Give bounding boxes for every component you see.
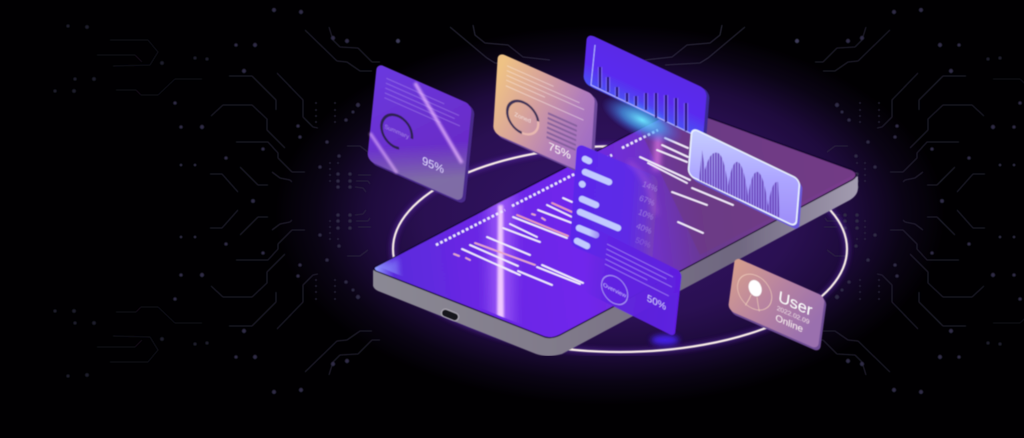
card: area chart [688, 128, 803, 231]
paragraph lines [605, 244, 673, 297]
stripe list [546, 113, 577, 150]
ring label: Summary [384, 124, 409, 141]
percentages: 50% [634, 236, 652, 250]
background glow [275, 25, 945, 405]
screen light beam [378, 110, 860, 345]
card: horizontal bars [570, 143, 659, 279]
screen text lines [454, 138, 733, 285]
glowing ring [393, 146, 847, 352]
ring [600, 270, 629, 310]
percentages: 10% [637, 208, 655, 222]
date: 2022.02.09 [776, 305, 810, 326]
card: 95% summary [367, 63, 475, 205]
status: Online [775, 313, 804, 336]
percentage: 50% [646, 293, 667, 313]
percentages: 40% [635, 222, 653, 236]
cyan glow [595, 86, 689, 154]
progress ring [506, 96, 539, 140]
charging port [440, 308, 460, 322]
avatar [735, 268, 774, 316]
percentage: 75% [548, 141, 571, 162]
screen dotted header [436, 130, 658, 245]
percentage: 95% [421, 155, 444, 176]
paragraph lines [506, 66, 585, 120]
striped area [699, 150, 780, 218]
ring label: Overview [603, 283, 627, 300]
pink arc [628, 162, 656, 215]
card light streaks [370, 83, 462, 173]
paragraph lines [384, 78, 461, 131]
card: user profile [728, 257, 827, 352]
progress ring [379, 112, 414, 151]
card glow under 50% card [651, 335, 679, 345]
percentages: 14% [641, 180, 659, 194]
user name: User [777, 288, 814, 320]
percentages: 67% [638, 194, 656, 208]
phone screen [374, 109, 856, 338]
chart axes [591, 45, 692, 134]
phone body side [373, 176, 858, 356]
bars [577, 159, 618, 246]
chart bars [600, 67, 686, 131]
card: bar chart [583, 33, 710, 154]
percentages [634, 180, 659, 250]
card: 75% summary [493, 52, 598, 179]
ring label: Zoned [514, 112, 531, 125]
card: 50% overview [583, 226, 682, 337]
main artwork [367, 33, 860, 356]
phone [373, 109, 860, 356]
